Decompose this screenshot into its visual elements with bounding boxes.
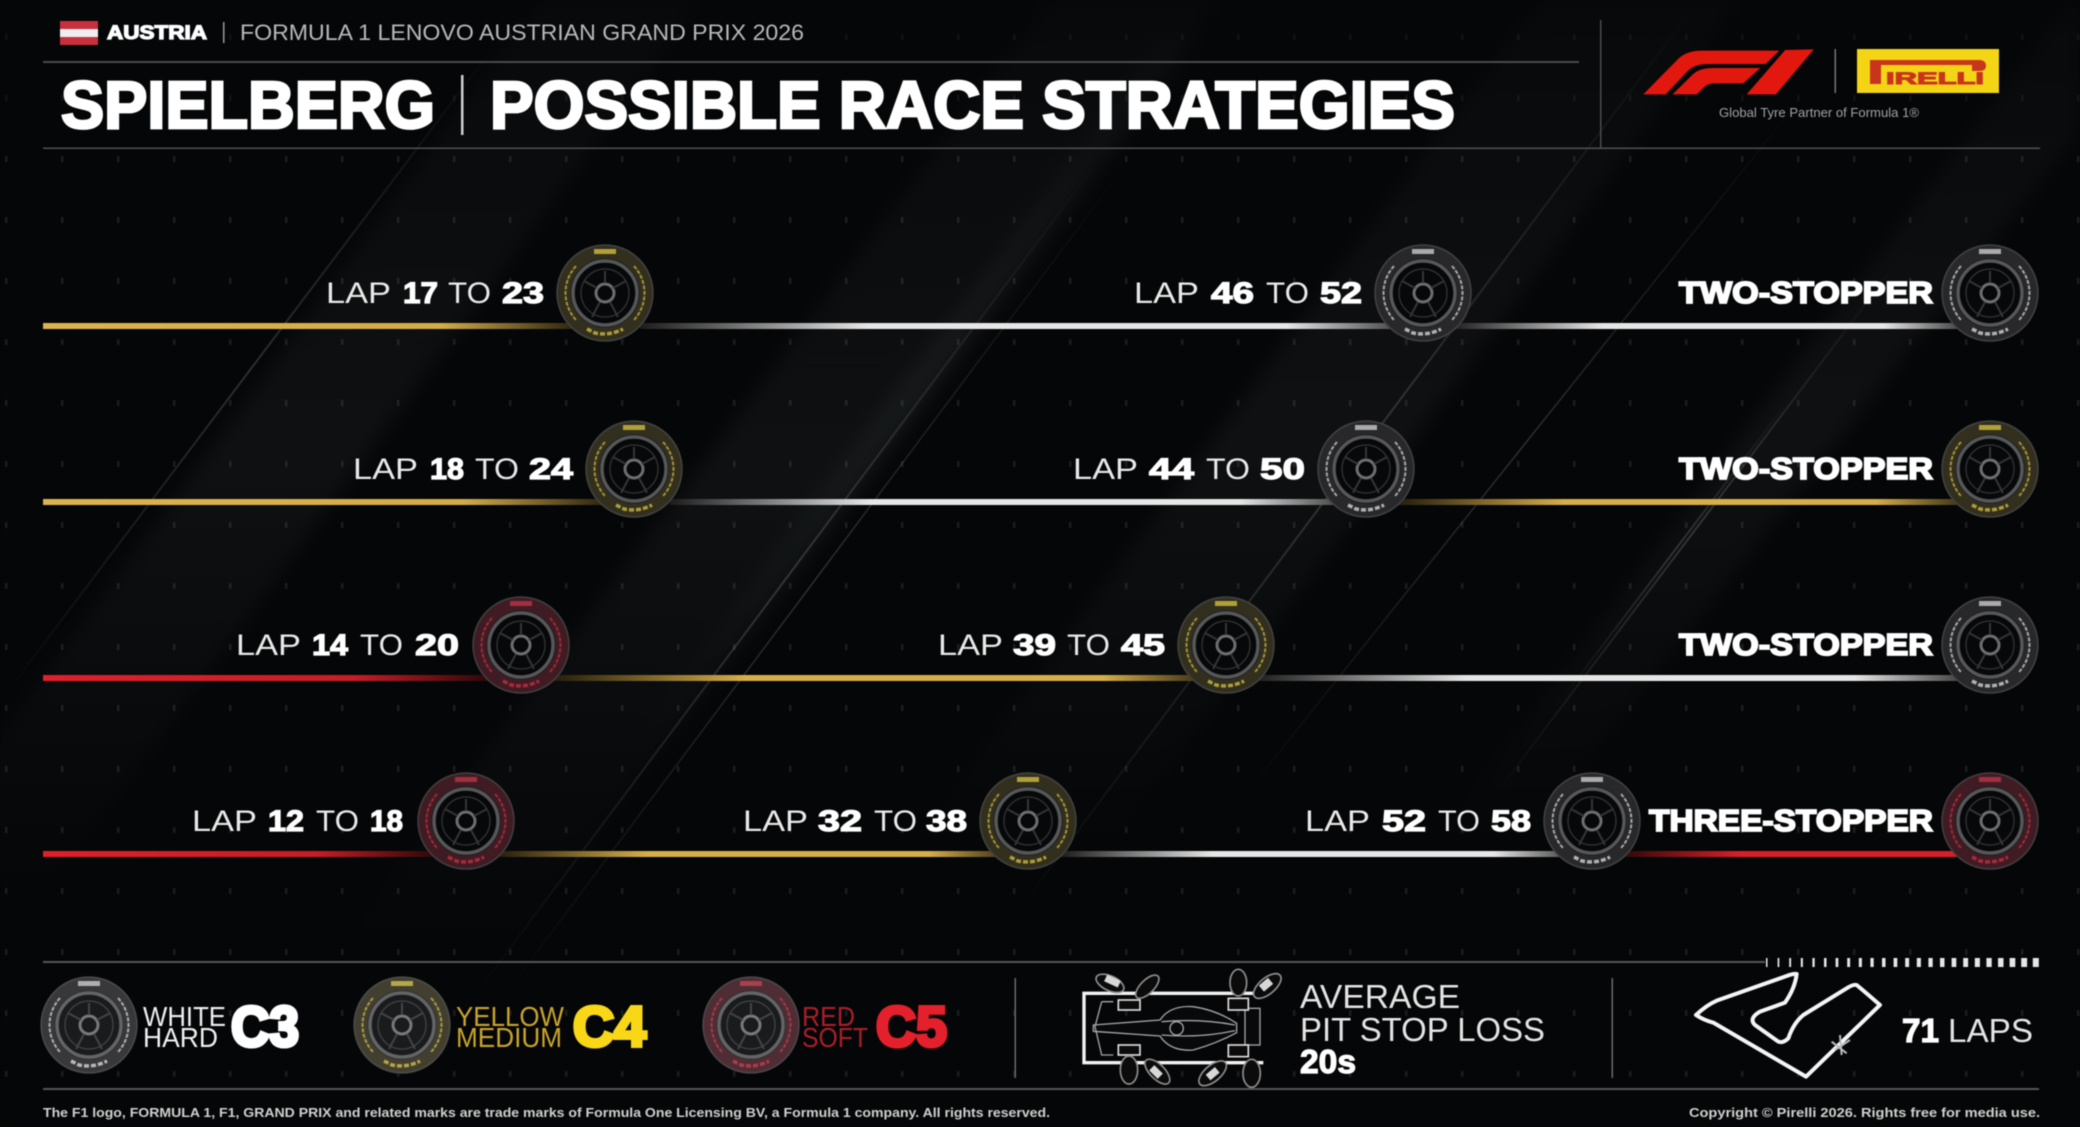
tyre: hard [1942,597,2038,693]
pit window label: TO [1438,805,1480,838]
pit window label: 23 [502,277,544,310]
tyre: medium [1178,597,1274,693]
legend: hard C3 [41,977,299,1073]
pit window label: LAP [1305,805,1370,838]
tyre: medium [980,773,1076,869]
tyre: medium [1942,421,2038,517]
pit window label [353,453,573,486]
icon: Austrian flag [60,21,98,45]
pit window label: LAP [938,629,1003,662]
country name: AUSTRIA [107,23,207,44]
icon: Pirelli logo [1857,49,1999,93]
compound code: C3 [231,995,299,1059]
pit window label [1073,453,1305,486]
pit window label: TO [1206,453,1250,486]
lap count [1902,1012,2033,1049]
stint lines [43,851,1960,857]
title: SPIELBERG [61,68,435,143]
footer: copyright: Copyright © Pirelli 2026. Rights free for media use. [1689,1105,2040,1120]
pit stop block [1084,969,1545,1090]
pit window label [938,629,1165,662]
strategy name: THREE-STOPPER [1649,803,1933,838]
pit window label [192,805,403,838]
stint lines [43,499,1960,505]
pit window label: 58 [1491,805,1531,838]
compound label: YELLOW [456,1001,565,1032]
tyre: soft [418,773,514,869]
pit window label: 12 [268,805,304,838]
pit window label [743,805,967,838]
pit window label: LAP [236,629,301,662]
stint lines [43,675,1960,681]
pit window label: 39 [1013,629,1056,662]
lap count: 71 [1902,1012,1939,1049]
pit window label: 46 [1211,277,1254,310]
tyre: hard [41,977,137,1073]
strategy name: TWO-STOPPER [1679,451,1933,486]
tyre: soft [473,597,569,693]
compound label [456,1001,565,1053]
strategy row 3 [43,597,2038,693]
partner tagline: Global Tyre Partner of Formula 1® [1719,106,1920,120]
pit stop text [1300,978,1545,1080]
pit window label: 24 [529,453,573,486]
pit window label: LAP [192,805,257,838]
compound label: MEDIUM [456,1022,562,1053]
tyre: medium [557,245,653,341]
title: POSSIBLE RACE STRATEGIES [490,68,1455,143]
pit window label: TO [475,453,519,486]
legend: medium C4 [354,977,646,1073]
pit window label: 17 [403,277,438,310]
stint lines [43,323,1960,329]
pit stop text: AVERAGE [1300,978,1460,1015]
icon: track map [1696,974,1880,1077]
pit window label: 18 [430,453,464,486]
tyre: hard [1375,245,1471,341]
logos [1643,49,1999,120]
strategy name: TWO-STOPPER [1679,275,1933,310]
pit window label: LAP [1073,453,1138,486]
icon: pit box with car and crew [1084,969,1285,1090]
pit window label: 52 [1382,805,1426,838]
pit window label: 14 [312,629,348,662]
compound label: RED [802,1001,855,1032]
pit stop text: 20s [1300,1043,1356,1080]
compound label [802,1001,868,1053]
strategy row 2 [43,421,2038,517]
pit window label: LAP [326,277,391,310]
tyre: medium [586,421,682,517]
tyre: hard [1318,421,1414,517]
pit window label [1134,277,1362,310]
pit window label: 38 [926,805,967,838]
pit window label [1305,805,1531,838]
compound label [143,1001,226,1053]
pit window label: LAP [1134,277,1199,310]
event name: FORMULA 1 LENOVO AUSTRIAN GRAND PRIX 2026 [240,20,804,45]
tyre: hard [1942,245,2038,341]
icon: F1 logo [1643,49,1814,94]
compound label: WHITE [143,1001,226,1032]
icon: Pirelli logo: IRELLI [1886,69,1984,88]
lap tick scale [1766,958,2039,967]
tyre: medium [354,977,450,1073]
pit window label: 44 [1149,453,1194,486]
pit window label: 18 [370,805,403,838]
pit window label [236,629,459,662]
pit window label: 50 [1260,453,1305,486]
pit window label: 45 [1121,629,1165,662]
tyre: hard [1544,773,1640,869]
compound code: C5 [876,995,947,1059]
pit window label: TO [1266,277,1309,310]
title [61,68,1455,143]
pit window label: TO [1067,629,1110,662]
compound code: C4 [573,995,646,1059]
pit window label: TO [448,277,491,310]
track and laps [1696,974,2033,1077]
pit window label: LAP [743,805,808,838]
pit window label: 52 [1320,277,1362,310]
compound label: SOFT [802,1022,868,1053]
pit window label: 32 [818,805,862,838]
pit window label: TO [360,629,403,662]
footer: trademark note: The F1 logo, FORMULA 1, F1, GRAND PRIX and related marks are trade marks of Formula One Licensing BV, a Formula 1 company. All rights reserved. [43,1105,1050,1120]
legend: soft C5 [703,977,947,1073]
pit window label: LAP [353,453,418,486]
pit window label: TO [874,805,917,838]
lap count: LAPS [1948,1012,2033,1049]
pit stop text: PIT STOP LOSS [1300,1011,1545,1048]
tyre: soft [703,977,799,1073]
tyre: soft [1942,773,2038,869]
pit window label: 20 [415,629,459,662]
strategy row 4 [43,773,2038,869]
compound label: HARD [143,1022,218,1053]
strategy row 1 [43,245,2038,341]
pit window label [326,277,544,310]
pit window label: TO [316,805,359,838]
header: country and event line [60,20,804,45]
strategy name: TWO-STOPPER [1679,627,1933,662]
